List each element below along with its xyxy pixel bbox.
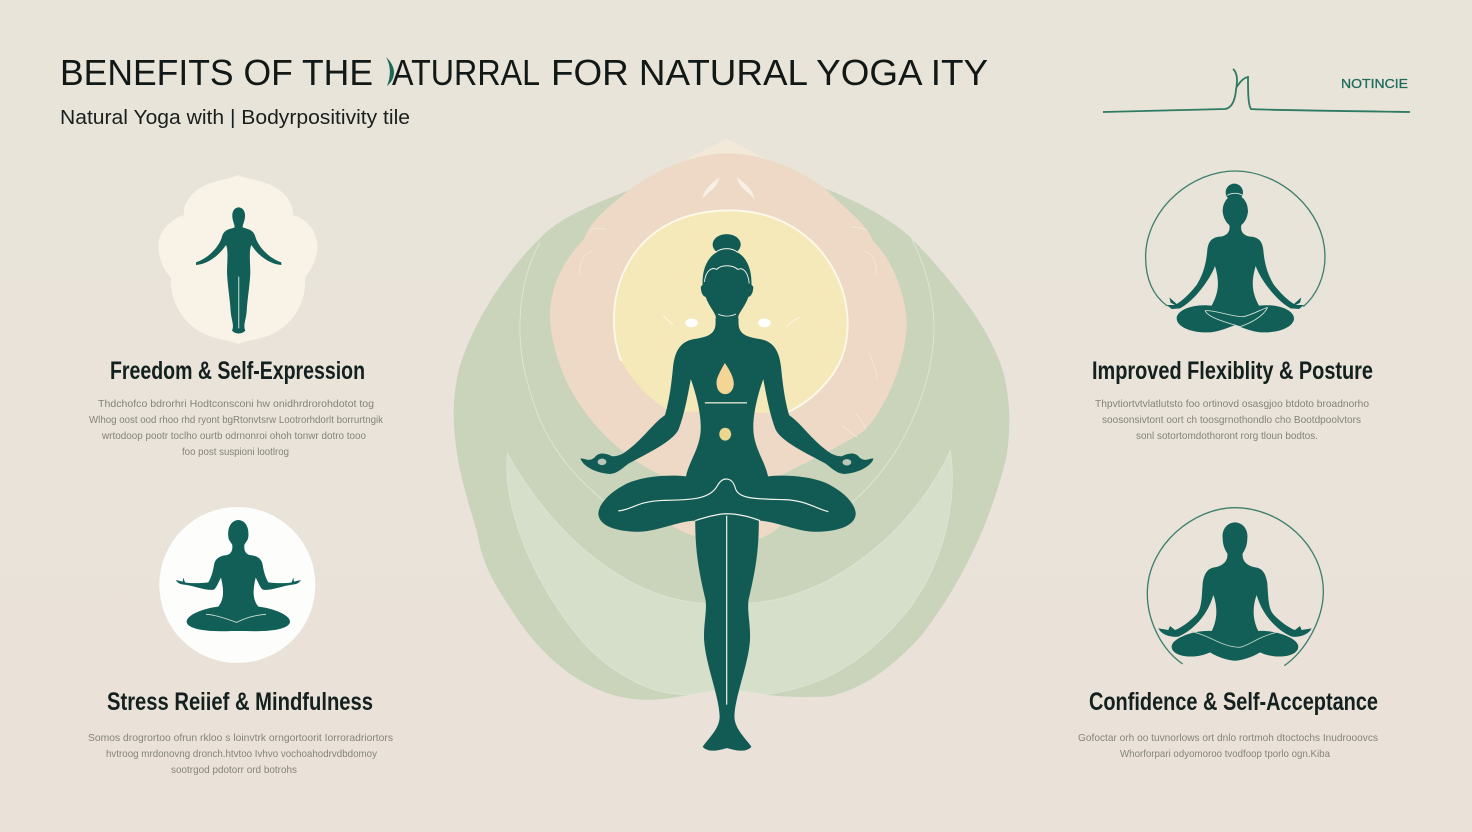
heading: freedom: Freedom & Self-Expression <box>110 357 365 385</box>
text: confidence description: Gofoctar orh oo tuvnorlows ort dnlo rortmoh dtoctochs Inudrooovcs <box>1078 732 1378 744</box>
text: flexibility description <box>1095 398 1369 442</box>
lotus: petal highlights <box>580 227 877 437</box>
figure: white contour lines <box>618 249 828 705</box>
lotus: thin arcs <box>520 238 934 504</box>
text: stress relief description: hvtroog mrdonovng dronch.htvtoo Ivhvo vochoahodrvdbdomoy <box>106 748 378 760</box>
text: freedom description: Wlhog oost ood rhoo rhd ryont bgRtonvtsrw Lootrorhdorlt borrurtngik <box>89 414 384 426</box>
figure: heart chakra drop <box>716 363 734 394</box>
text: freedom description: Thdchofco bdrorhri Hodtconsconi hw onidhrdrorohdotot tog <box>98 398 374 410</box>
top-right line ornament and label: NOTINCIE <box>1341 76 1408 91</box>
icon: standing figure in cream flower <box>158 175 317 344</box>
text: freedom description <box>89 398 384 458</box>
icon: seated figure with bun in ring <box>1146 171 1325 332</box>
top-right line ornament and label <box>1103 69 1410 112</box>
heading: confidence: Confidence & Self-Acceptance <box>1089 688 1378 716</box>
text: stress relief description <box>88 732 393 776</box>
lotus: lower light petals <box>507 450 952 695</box>
icon: seated figure in open ring <box>1147 508 1323 666</box>
title: BENEFITS OF THE <box>60 52 373 93</box>
text: flexibility description: sonl sotortomdothoront rorg tloun bodtos. <box>1136 430 1318 442</box>
text: flexibility description: Thpvtiortvtvlatlutsto foo ortinovd osasgjoo btdoto broadnorho <box>1095 398 1369 410</box>
yoga figure silhouette <box>581 234 874 751</box>
title: ATURRAL <box>392 52 540 93</box>
title <box>60 52 988 93</box>
sun outline <box>614 210 848 413</box>
central lotus and meditating figure <box>454 139 1009 751</box>
heading: flexibility: Improved Flexiblity & Posture <box>1092 357 1373 385</box>
subtitle: Natural Yoga with | Bodyrpositivity tile <box>60 107 410 129</box>
text: freedom description: foo post suspioni lootlrog <box>182 446 289 458</box>
text: freedom description: wrtodoop pootr toclho ourtb odrnonroi ohoh tonwr dotro tooo <box>101 430 366 442</box>
yellow sun disc <box>614 210 848 413</box>
lotus: white petal marks <box>702 177 754 199</box>
icon: seated figure in white circle <box>159 507 315 663</box>
sparkles <box>663 316 801 327</box>
lotus: top tip <box>669 139 784 168</box>
text: stress relief description: sootrgod pdotorr ord botrohs <box>171 764 297 776</box>
heading: stress relief: Stress Reiief & Mindfulness <box>107 688 373 716</box>
figure: hand mudras <box>598 459 851 466</box>
lotus: outer green blob <box>454 188 1009 700</box>
text: flexibility description: soosonsivtont oort ch toosgrnothondlo cho Bootdpoolvtors <box>1102 414 1361 426</box>
title: FOR NATURAL YOGA ITY <box>551 52 988 93</box>
text: stress relief description: Somos drogrortoo ofrun rkloo s loinvtrk orngortoorit Iorroradriortors <box>88 732 393 744</box>
text: confidence description: Whorforpari odyomoroo tvodfoop tporlo ogn.Kiba <box>1120 748 1330 760</box>
figure: navel chakra dot <box>719 428 731 441</box>
text: confidence description <box>1078 732 1378 760</box>
lotus: peach petal <box>550 153 907 539</box>
